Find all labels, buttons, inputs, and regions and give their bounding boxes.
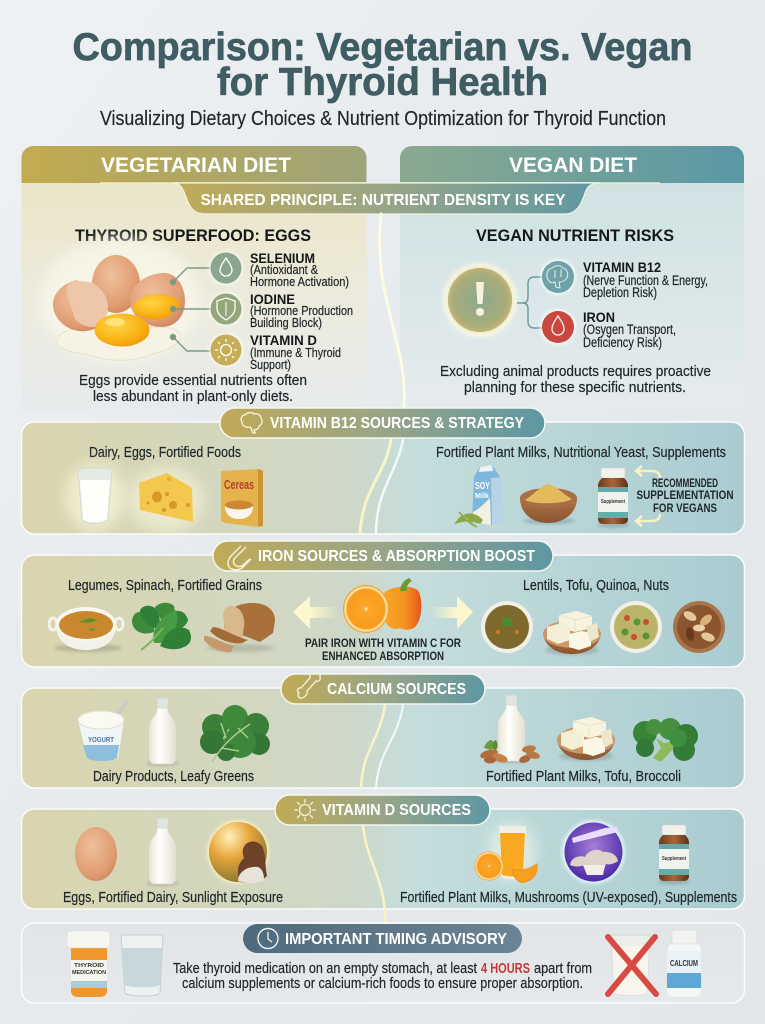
- icon: sun: [294, 799, 316, 821]
- icon: egg: [75, 827, 117, 881]
- text: iodine: (Hormone Production: [250, 303, 353, 318]
- icon: iodine: [209, 292, 243, 326]
- icon: quinoa salad: [610, 601, 662, 653]
- text: recommended supplementation: SUPPLEMENTATION: [636, 490, 734, 502]
- panel: vegetarian diet: [22, 146, 366, 410]
- icon: supplement bottle: [597, 468, 629, 528]
- icon: cheese: [128, 468, 204, 532]
- text: eggs note: Eggs provide essential nutrients often: [79, 372, 307, 389]
- icon: tofu bowl: [543, 611, 601, 655]
- pill: advisory title: IMPORTANT TIMING ADVISORY: [285, 931, 508, 948]
- text: vitamin d: Support): [250, 357, 291, 372]
- text: selenium: SELENIUM: [250, 251, 315, 266]
- icon: yogurt: [78, 700, 128, 761]
- pill: calcium: CALCIUM SOURCES: [327, 681, 466, 698]
- label: vegetarian calcium: Dairy Products, Leafy Greens: [93, 768, 254, 785]
- text: advisory message: [173, 960, 592, 992]
- heading: thyroid superfood: THYROID SUPERFOOD: EGGS: [75, 227, 311, 245]
- icon: mixed nuts: [673, 601, 725, 653]
- arrow: right: [430, 596, 473, 629]
- icon: water glass: [121, 935, 163, 996]
- text: vitamin b12: Depletion Risk): [583, 285, 657, 300]
- icon: calcium bottle: [667, 930, 701, 997]
- icon: cereal box: [221, 469, 263, 527]
- icon: supplement bottle: Supplement: [601, 499, 625, 505]
- vegetarian header: VEGETARIAN DIET: [101, 154, 291, 177]
- text: vegan note: planning for these specific nutrients.: [464, 379, 686, 396]
- vegan header: [400, 146, 744, 183]
- text: recommended supplementation: RECOMMENDED: [652, 478, 718, 490]
- panel: vitamin b12 sources: [22, 422, 744, 534]
- panel: vegan diet: [400, 146, 744, 410]
- connector lines: [170, 268, 210, 351]
- text: pair iron: ENHANCED ABSORPTION: [322, 651, 444, 663]
- text: selenium: [250, 251, 349, 289]
- icon: eggs: [40, 238, 200, 362]
- pill: vitamin b12: VITAMIN B12 SOURCES & STRATEGY: [270, 415, 525, 432]
- icon: selenium: [209, 251, 243, 285]
- icon: crossed-out milk: [608, 935, 656, 995]
- icon: orange: [343, 585, 389, 633]
- text: selenium: Hormone Activation): [250, 274, 349, 289]
- center river: [360, 214, 404, 922]
- vegan header: VEGAN DIET: [509, 154, 637, 177]
- icon: thyroid medication: MEDICATION: [72, 970, 106, 976]
- icon: bell pepper: [382, 578, 421, 630]
- arrow: left: [293, 596, 338, 629]
- icon: thyroid medication: [67, 931, 110, 997]
- icon: supplement bottle: [658, 825, 690, 884]
- text: iron: Deficiency Risk): [583, 335, 662, 350]
- text: pair iron: [305, 638, 462, 663]
- icon: plant milk with almonds: [479, 695, 541, 764]
- text: iodine: IODINE: [250, 292, 295, 307]
- bracket lines: [517, 277, 542, 328]
- arrows: recommended: [636, 466, 660, 526]
- text: iron: IRON: [583, 309, 615, 325]
- title: for Thyroid Health: [217, 61, 548, 104]
- banner: shared principle: [100, 183, 660, 214]
- icon: bread: [204, 603, 275, 652]
- text: vitamin b12: VITAMIN B12: [583, 259, 661, 275]
- icon: orange juice: [474, 822, 537, 882]
- pill: vitamin d: VITAMIN D SOURCES: [322, 802, 471, 819]
- text: advisory message: apart from: [534, 960, 592, 977]
- text: vitamin b12: [583, 259, 708, 300]
- icon: supplement bottle: Supplement: [662, 856, 686, 862]
- icon: yogurt: YOGURT: [88, 735, 114, 744]
- icon: thyroid medication: THYROID: [74, 963, 104, 969]
- icon: cereal box: Cereas: [224, 477, 254, 492]
- icon: tofu bowl: [557, 717, 615, 761]
- text: recommended supplementation: FOR VEGANS: [653, 503, 717, 515]
- text: vitamin d: [250, 333, 341, 372]
- label: vegetarian iron: Legumes, Spinach, Fortified Grains: [68, 577, 262, 594]
- text: pair iron: PAIR IRON WITH VITAMIN C FOR: [305, 638, 462, 650]
- pill: iron: [213, 541, 553, 571]
- icon: vitamin d: [209, 333, 243, 367]
- icon: bone: [298, 673, 320, 698]
- icon: nutritional yeast bowl: [520, 484, 577, 524]
- icon: vitamin b12: [540, 259, 576, 295]
- text: iodine: Building Block): [250, 315, 322, 330]
- icon: spinach: [132, 603, 191, 650]
- heading: vegan nutrient risks: VEGAN NUTRIENT RISKS: [476, 227, 674, 245]
- text: eggs note: [79, 372, 307, 405]
- text: advisory message: 4 HOURS: [481, 960, 530, 977]
- panel: calcium sources: [22, 688, 744, 788]
- label: vegetarian vitamin d: Eggs, Fortified Dairy, Sunlight Exposure: [63, 889, 283, 906]
- icon: sunlight portrait: [207, 820, 269, 884]
- icon: milk bottle: [146, 698, 178, 766]
- panel: timing advisory: [22, 923, 744, 1003]
- pill: vitamin d: [275, 795, 490, 825]
- icon: soy milk carton: Milk: [475, 493, 489, 500]
- text: iron: [583, 309, 676, 350]
- text: iron: (Osygen Transport,: [583, 322, 676, 337]
- icon: broccoli: [633, 718, 698, 762]
- pill: advisory title: [243, 924, 522, 953]
- text: selenium: (Antioxidant &: [250, 262, 318, 277]
- pill: iron: IRON SOURCES & ABSORPTION BOOST: [258, 548, 535, 565]
- text: iodine: [250, 292, 353, 330]
- icon: uv mushrooms: [562, 820, 626, 884]
- text: vegan note: [440, 363, 711, 396]
- text: advisory message: Take thyroid medication on an empty stomach, at least: [173, 960, 478, 977]
- icon: lentil soup bowl: [49, 607, 123, 652]
- panel: vitamin d sources: [22, 809, 744, 909]
- icon: magnet: [228, 546, 251, 570]
- label: vegan iron: Lentils, Tofu, Quinoa, Nuts: [523, 577, 669, 594]
- text: recommended supplementation: [636, 478, 734, 515]
- text: vitamin b12: (Nerve Function & Energy,: [583, 273, 708, 288]
- icon: soy milk carton: SOY: [475, 481, 490, 492]
- icon: glass of milk: [65, 463, 125, 531]
- title: Comparison: Vegetarian vs. Vegan: [72, 26, 692, 69]
- banner: shared principle: SHARED PRINCIPLE: NUTRIENT DENSITY IS KEY: [200, 192, 566, 209]
- label: vegan calcium: Fortified Plant Milks, Tofu, Broccoli: [486, 768, 681, 785]
- icon: iron: [540, 309, 576, 345]
- icon: brain: [241, 413, 262, 433]
- vegetarian header: [22, 146, 366, 183]
- label: vegetarian b12: Dairy, Eggs, Fortified Foods: [89, 444, 241, 461]
- text: advisory message: calcium supplements or calcium-rich foods to ensure proper absorption.: [182, 975, 583, 992]
- icon: soy milk carton: [456, 465, 503, 527]
- icon: lentil bowl: [481, 601, 533, 653]
- icon: calcium bottle: CALCIUM: [670, 959, 698, 968]
- icon: milk bottle: [146, 818, 178, 886]
- title: [72, 26, 692, 104]
- text: vitamin d: (Immune & Thyroid: [250, 345, 341, 360]
- pill: vitamin b12: [220, 408, 545, 438]
- text: eggs note: less abundant in plant-only diets.: [93, 388, 293, 405]
- text: vitamin d: VITAMIN D: [250, 333, 317, 348]
- icon: kale: [200, 705, 270, 762]
- text: vegan note: Excluding animal products requires proactive: [440, 363, 711, 380]
- subtitle: Visualizing Dietary Choices & Nutrient Optimization for Thyroid Function: [100, 108, 666, 130]
- icon: warning: [443, 263, 517, 337]
- panel: iron sources: [22, 555, 744, 667]
- pill: calcium: [281, 673, 485, 704]
